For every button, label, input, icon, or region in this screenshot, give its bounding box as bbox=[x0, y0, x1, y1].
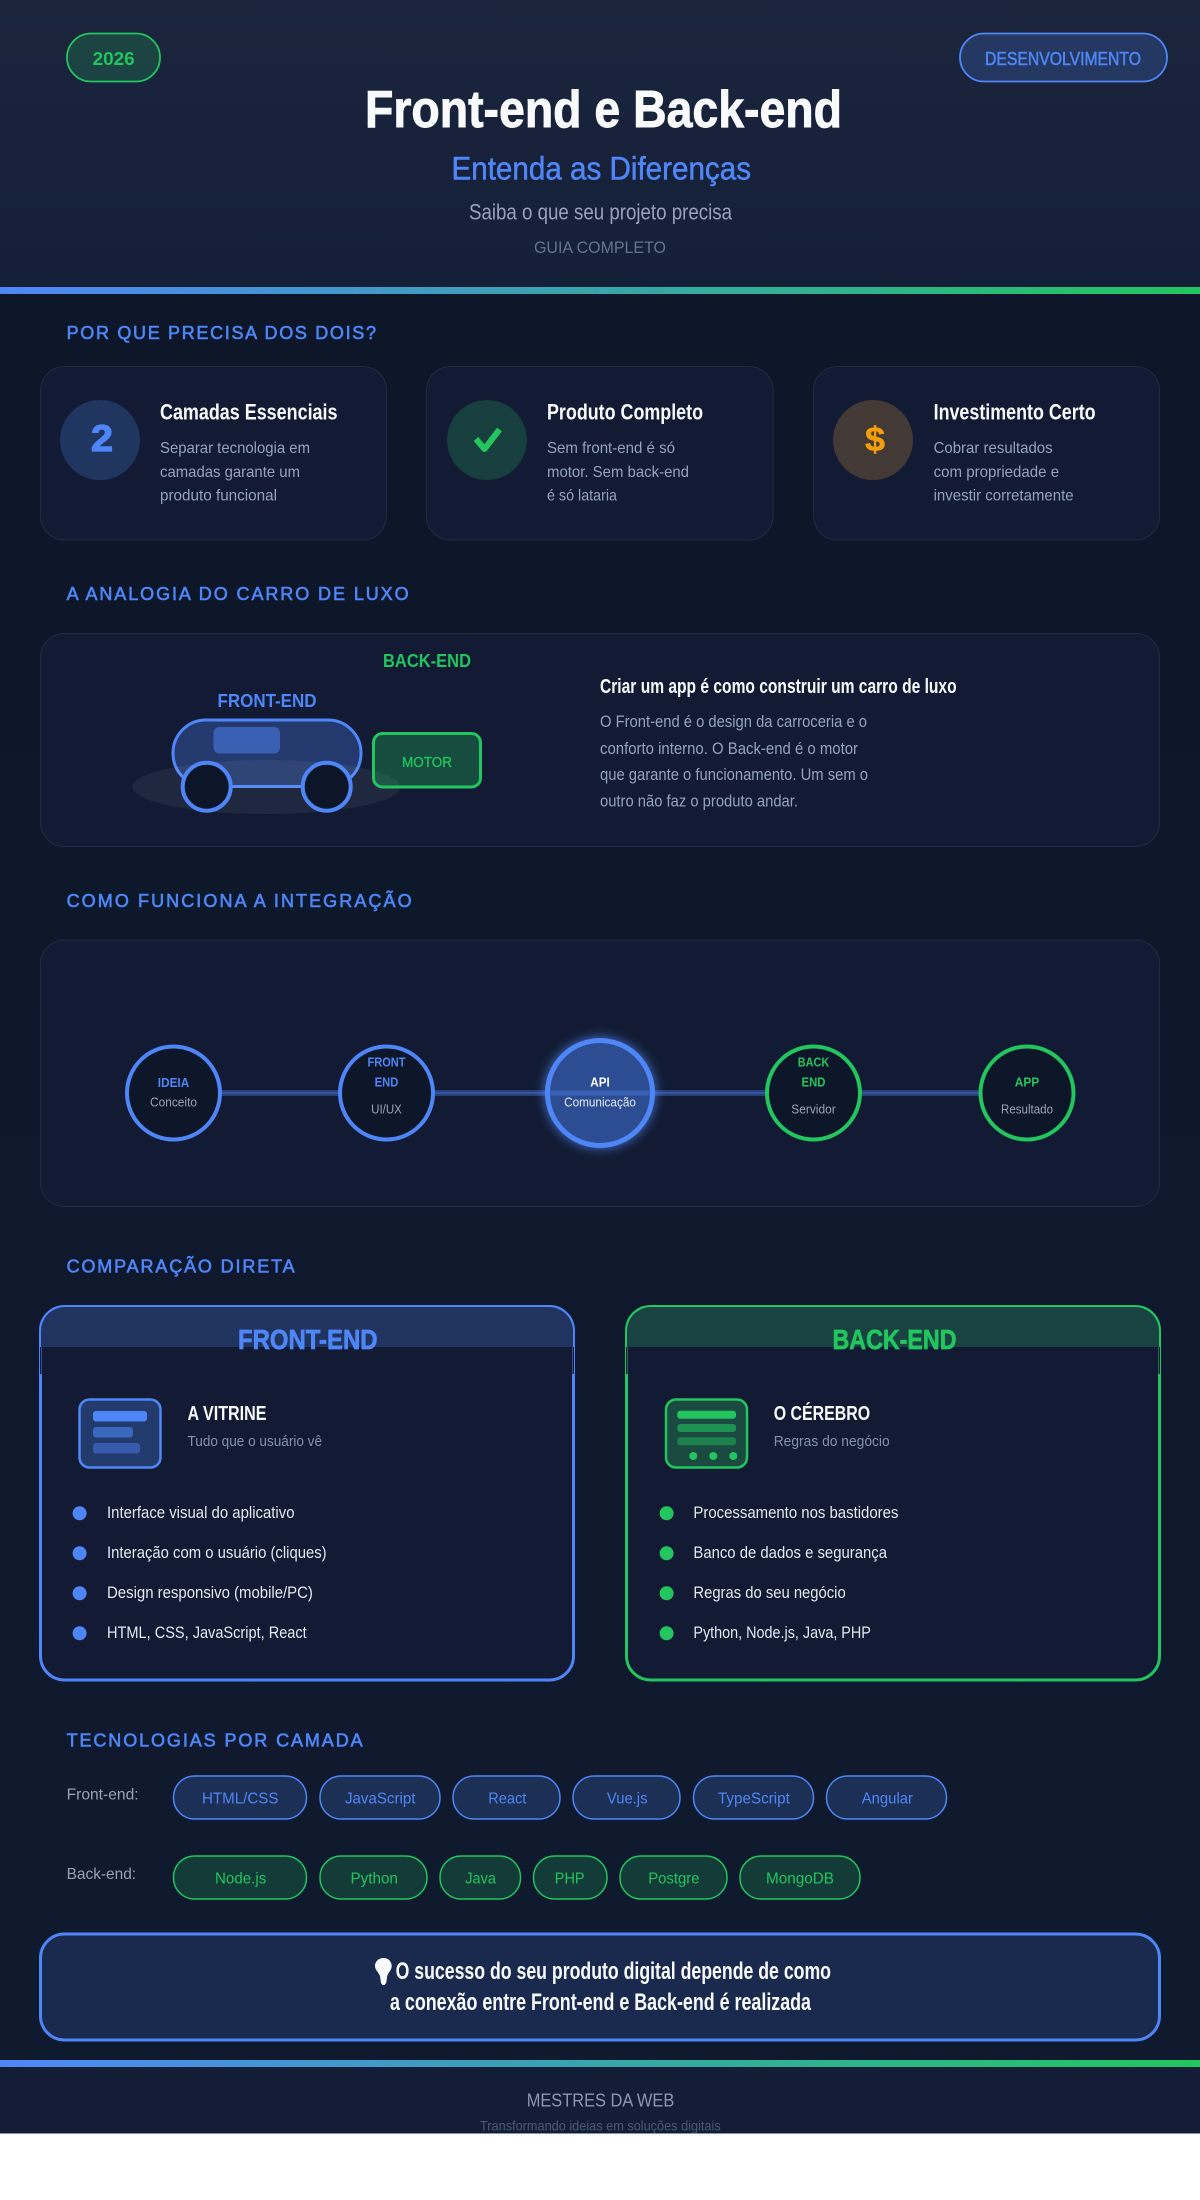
card description bbox=[160, 440, 310, 505]
ground shadow bbox=[132, 760, 400, 814]
front-end list: HTML, CSS, JavaScript, React bbox=[107, 1623, 307, 1642]
node: front end: FRONT bbox=[368, 1055, 406, 1070]
card description: motor. Sem back-end bbox=[547, 464, 689, 481]
back-end role: O CÉREBRO bbox=[774, 1402, 870, 1425]
section heading: tecnologias: TECNOLOGIAS POR CAMADA bbox=[67, 1731, 363, 1751]
technology row: back-end: Node.js bbox=[215, 1870, 266, 1887]
front-end role: A VITRINE bbox=[188, 1403, 266, 1425]
label: front-end: FRONT-END bbox=[218, 691, 316, 711]
front-end list bbox=[73, 1503, 327, 1642]
node: app: APP bbox=[1015, 1075, 1040, 1090]
card: produto completo bbox=[426, 366, 773, 540]
car illustration bbox=[132, 651, 480, 814]
panel: integration flow bbox=[40, 940, 1160, 1206]
footer brand: MESTRES DA WEB bbox=[527, 2091, 674, 2111]
tagline: Saiba o que seu projeto precisa bbox=[469, 200, 733, 224]
node: front end bbox=[340, 1046, 433, 1140]
card description: Separar tecnologia em bbox=[160, 440, 310, 457]
car body bbox=[173, 720, 361, 786]
page edge line bbox=[0, 2133, 1200, 2134]
analogy heading: Criar um app é como construir um carro de luxo bbox=[600, 676, 957, 698]
technology row: front-end: React bbox=[488, 1790, 527, 1807]
card title: Camadas Essenciais bbox=[160, 400, 338, 424]
footer bbox=[0, 2067, 1200, 2134]
column header band bbox=[627, 1307, 1159, 1347]
analogy text: conforto interno. O Back-end é o motor bbox=[600, 740, 858, 758]
callout text: O sucesso do seu produto digital depende de como bbox=[396, 1958, 831, 1985]
technology row: front-end: Vue.js bbox=[607, 1790, 648, 1807]
card description: camadas garante um bbox=[160, 464, 300, 481]
icon: number 2: 2 bbox=[91, 418, 113, 459]
callout text bbox=[390, 1958, 831, 2016]
node: app: Resultado bbox=[1001, 1102, 1053, 1116]
section heading: comparacao: COMPARAÇÃO DIRETA bbox=[67, 1256, 295, 1277]
card: camadas essenciais bbox=[40, 366, 386, 540]
card title: Investimento Certo bbox=[934, 400, 1096, 424]
section heading: integracao: COMO FUNCIONA A INTEGRAÇÃO bbox=[67, 890, 412, 911]
panel: front-end comparison bbox=[40, 1306, 574, 1680]
bottom gradient divider bbox=[0, 2060, 1200, 2067]
subtitle: Entenda as Diferenças bbox=[452, 150, 751, 186]
card description: Cobrar resultados bbox=[934, 440, 1053, 457]
back-end list: Python, Node.js, Java, PHP bbox=[693, 1623, 871, 1642]
card description bbox=[934, 440, 1074, 505]
column title: FRONT-END bbox=[238, 1324, 378, 1355]
node: front end: UI/UX bbox=[371, 1102, 402, 1116]
node: api: API bbox=[590, 1075, 610, 1090]
connector line bbox=[173, 1090, 1027, 1096]
guide label: GUIA COMPLETO bbox=[534, 238, 666, 257]
technology row: front-end: JavaScript bbox=[345, 1790, 416, 1807]
card description: com propriedade e bbox=[934, 464, 1059, 481]
technology row: front-end: Angular bbox=[862, 1790, 914, 1807]
footer tagline: Transformando ideias em soluções digitais bbox=[480, 2118, 721, 2134]
node: api: Comunicação bbox=[564, 1095, 636, 1110]
wheel right bbox=[303, 763, 351, 811]
panel: car analogy bbox=[40, 634, 1160, 846]
car window bbox=[214, 727, 280, 754]
technology row: back-end: Python bbox=[350, 1870, 398, 1887]
node: back end: END bbox=[802, 1075, 826, 1090]
top gradient divider bbox=[0, 287, 1200, 294]
card description: investir corretamente bbox=[934, 488, 1074, 505]
panel: back-end comparison bbox=[626, 1306, 1160, 1680]
motor block: MOTOR bbox=[402, 754, 452, 771]
front-end role: Tudo que o usuário vê bbox=[188, 1433, 322, 1450]
icon: dollar bbox=[833, 400, 913, 480]
technology row: front-end: HTML/CSS bbox=[202, 1790, 278, 1807]
card description: é só lataria bbox=[547, 488, 617, 505]
back-end list: Banco de dados e segurança bbox=[693, 1543, 887, 1562]
technology row: front-end: Front-end: bbox=[67, 1786, 139, 1803]
column title: BACK-END bbox=[832, 1324, 956, 1355]
technology row: front-end bbox=[67, 1776, 947, 1819]
badge: desenvolvimento bbox=[960, 34, 1167, 82]
technology row: back-end: Postgre bbox=[648, 1870, 700, 1887]
front-end list: Design responsivo (mobile/PC) bbox=[107, 1583, 313, 1602]
node: app bbox=[980, 1046, 1074, 1140]
technology row: back-end: Java bbox=[465, 1870, 496, 1887]
technology row: back-end: MongoDB bbox=[766, 1870, 834, 1887]
badge: desenvolvimento: DESENVOLVIMENTO bbox=[985, 49, 1141, 69]
label: back-end: BACK-END bbox=[383, 651, 471, 671]
analogy text: O Front-end é o design da carroceria e o bbox=[600, 713, 867, 731]
wheel left bbox=[183, 763, 231, 811]
node: ideia: IDEIA bbox=[158, 1075, 190, 1090]
back-end list: Regras do seu negócio bbox=[693, 1583, 846, 1602]
node: front end: END bbox=[375, 1075, 398, 1090]
node: api bbox=[544, 1037, 656, 1149]
analogy text: outro não faz o produto andar. bbox=[600, 793, 798, 811]
icon: number 2 bbox=[60, 400, 140, 480]
card title: Produto Completo bbox=[547, 400, 703, 424]
node: back end bbox=[767, 1046, 860, 1140]
icon: screen layout bbox=[80, 1400, 160, 1468]
icon: server bbox=[666, 1400, 747, 1468]
node: back end: Servidor bbox=[791, 1102, 836, 1116]
callout text: a conexão entre Front-end e Back-end é realizada bbox=[390, 1989, 811, 2016]
analogy text bbox=[600, 713, 868, 811]
motor block bbox=[374, 734, 480, 787]
column header band bbox=[41, 1307, 573, 1347]
icon: dollar: $ bbox=[865, 421, 885, 459]
node: ideia bbox=[127, 1046, 220, 1140]
front-end list: Interação com o usuário (cliques) bbox=[107, 1543, 327, 1562]
back-end list bbox=[660, 1503, 898, 1642]
icon: check bbox=[447, 400, 527, 480]
callout bbox=[40, 1934, 1160, 2040]
title: Front-end e Back-end bbox=[365, 81, 842, 139]
icon: light bulb bbox=[375, 1958, 392, 1985]
technology row: back-end: PHP bbox=[555, 1870, 585, 1887]
badge: 2026: 2026 bbox=[93, 49, 135, 69]
technology row: front-end: TypeScript bbox=[718, 1790, 790, 1807]
header bbox=[0, 0, 1200, 287]
back-end role: Regras do negócio bbox=[774, 1433, 890, 1450]
front-end list: Interface visual do aplicativo bbox=[107, 1503, 294, 1522]
node: back end: BACK bbox=[798, 1055, 830, 1070]
analogy text: que garante o funcionamento. Um sem o bbox=[600, 766, 868, 784]
card description: produto funcional bbox=[160, 488, 277, 505]
card: investimento certo bbox=[814, 366, 1160, 540]
back-end list: Processamento nos bastidores bbox=[693, 1503, 898, 1522]
card description: Sem front-end é só bbox=[547, 440, 675, 457]
card description bbox=[547, 440, 689, 505]
technology row: back-end: Back-end: bbox=[67, 1866, 136, 1883]
technology row: back-end bbox=[67, 1856, 860, 1899]
back-end role bbox=[774, 1402, 890, 1450]
section heading: analogia: A ANALOGIA DO CARRO DE LUXO bbox=[67, 584, 409, 604]
badge: 2026 bbox=[67, 34, 160, 82]
section heading: por que: POR QUE PRECISA DOS DOIS? bbox=[67, 323, 376, 343]
front-end role bbox=[188, 1403, 322, 1450]
node: ideia: Conceito bbox=[150, 1095, 197, 1110]
